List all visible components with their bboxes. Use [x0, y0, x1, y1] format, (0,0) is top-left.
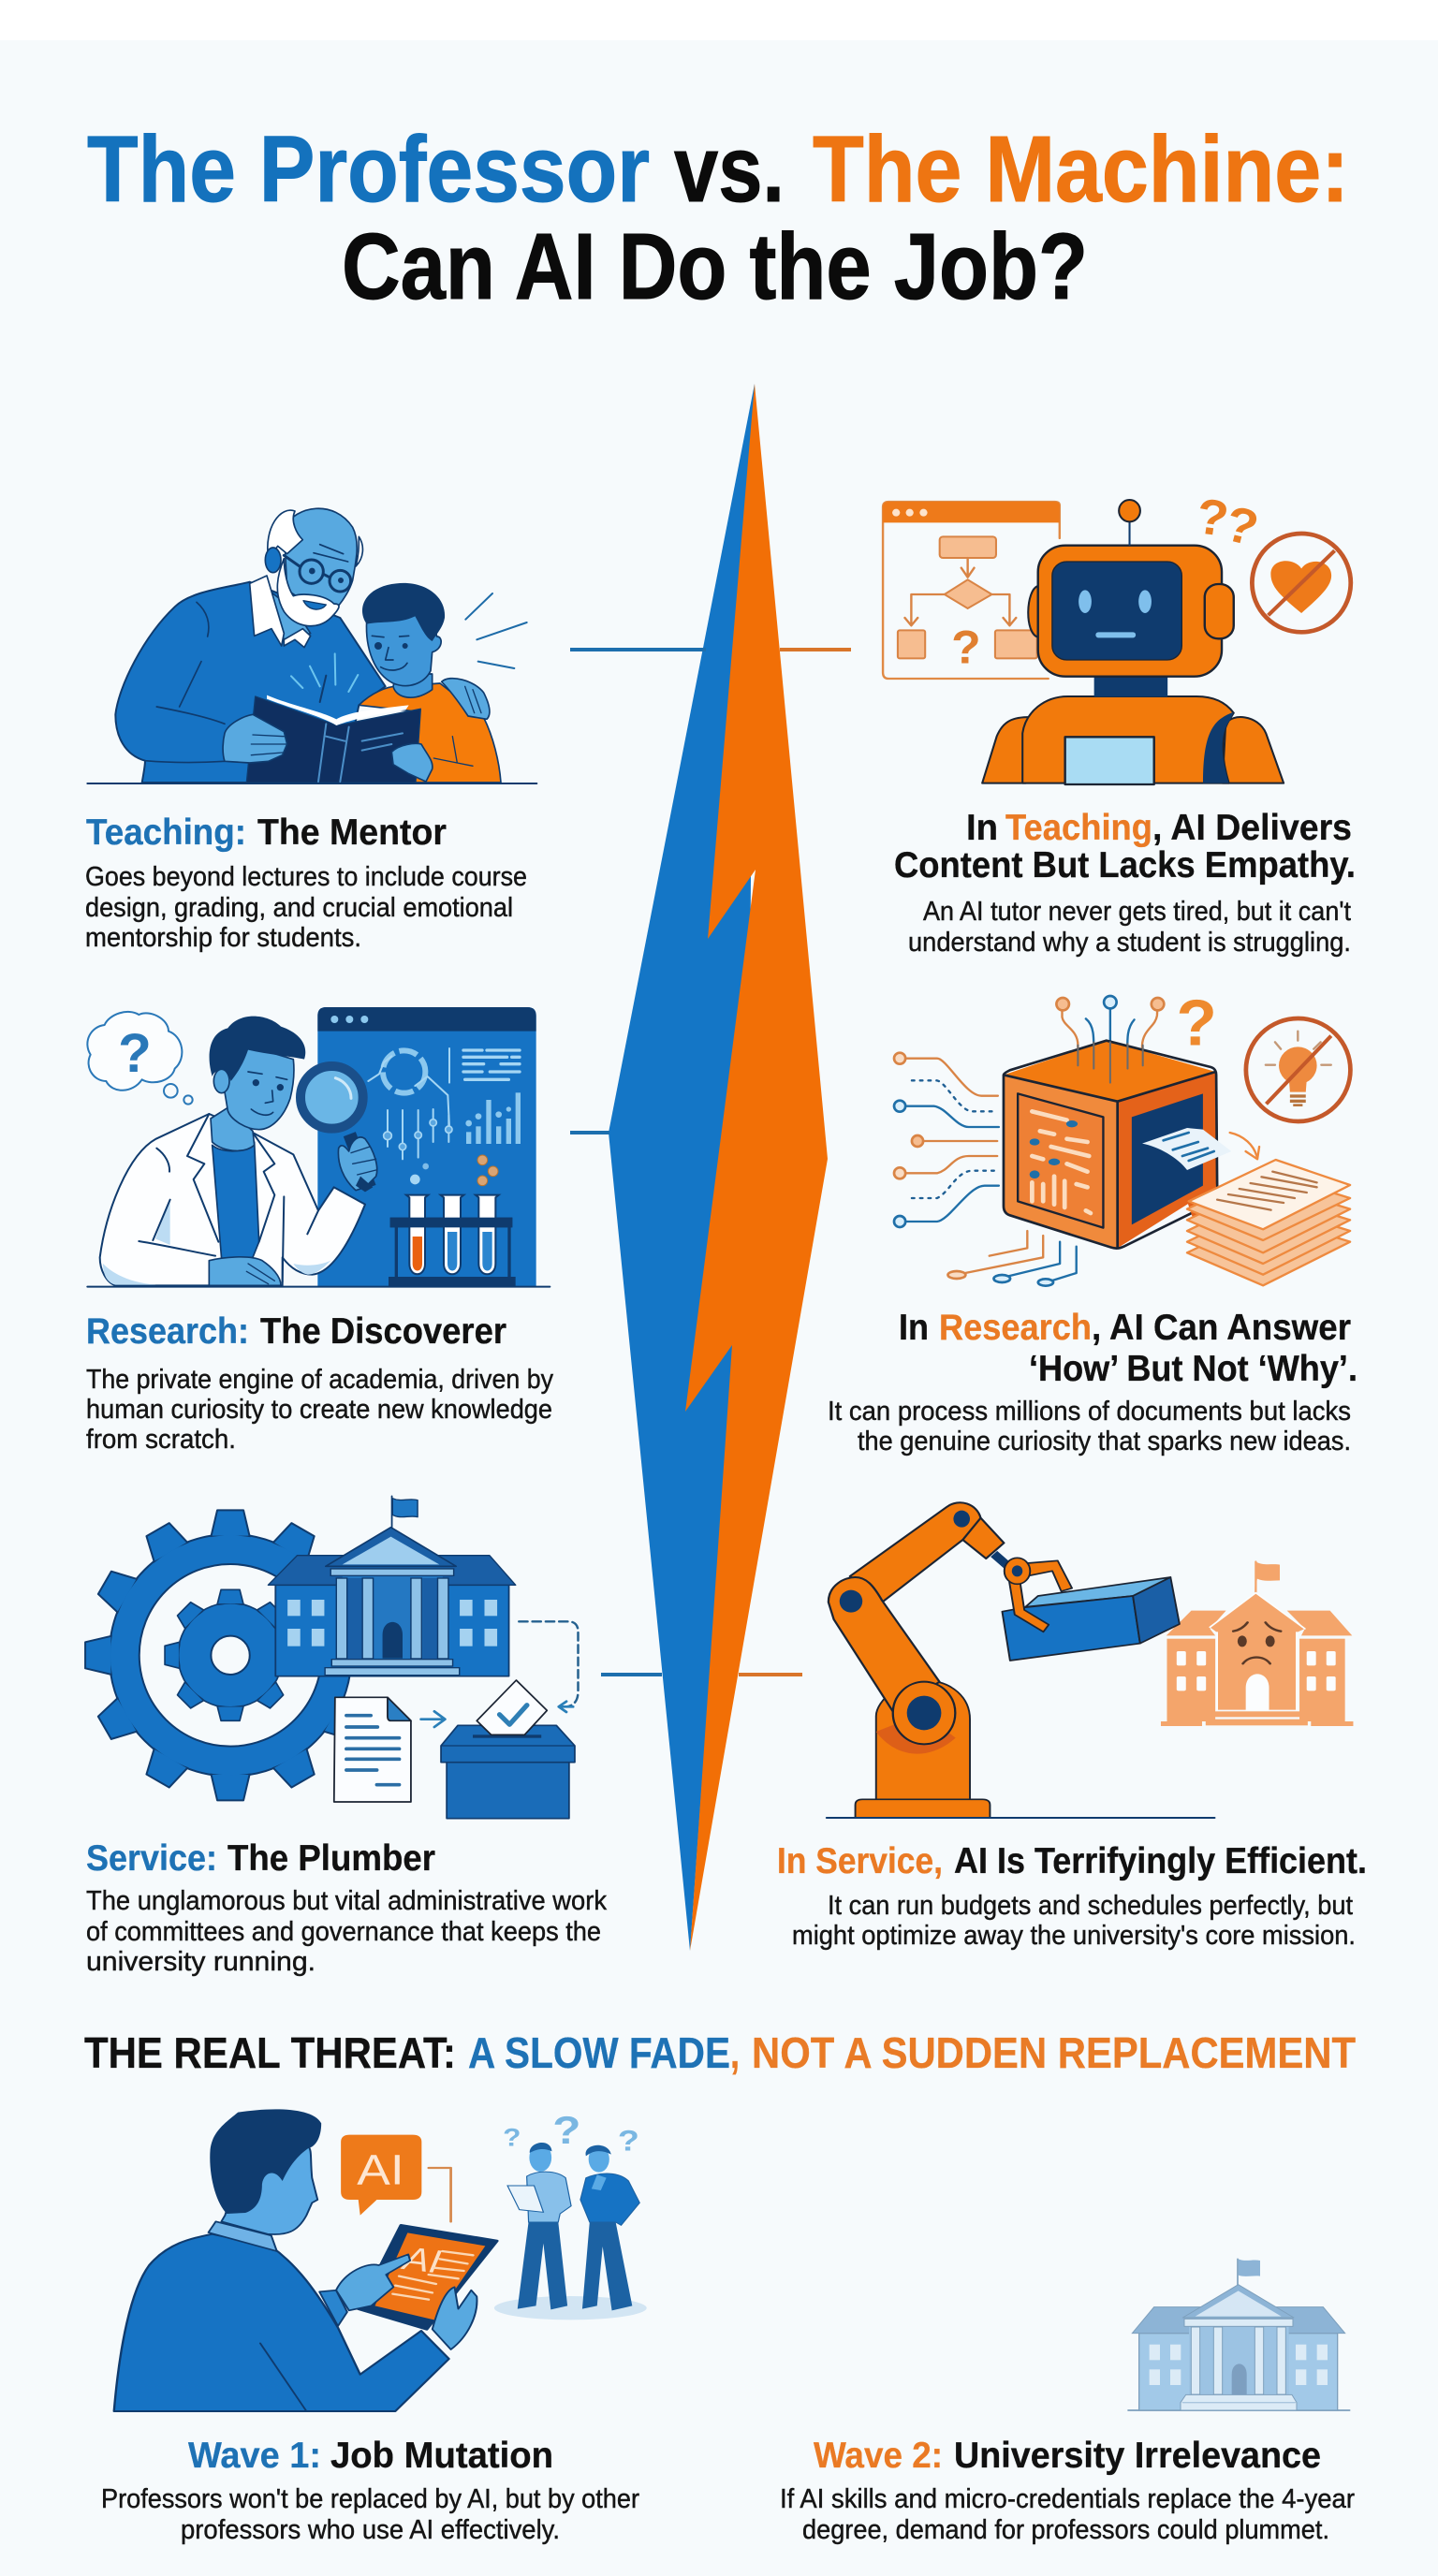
section heading: the real threat: A SLOW FADE: [468, 2028, 730, 2077]
text block: AI tutor: understand why a student is struggling.: [908, 928, 1351, 958]
icon: professor and student reading a book: [87, 508, 536, 783]
panel: research, the discoverer: [86, 1007, 553, 1455]
heading: AI in service: [777, 1841, 1367, 1881]
heading: Service: [86, 1838, 435, 1879]
panel: AI in service: [777, 1502, 1367, 1951]
section heading: the real threat: NOT A SUDDEN REPLACEMENT: [752, 2028, 1356, 2077]
icon: robot with flowchart and crossed heart: ?: [1220, 496, 1264, 557]
text block: research description: human curiosity to create new knowledge: [86, 1395, 552, 1425]
text block: budgets and schedules: [792, 1891, 1356, 1951]
text block: service description: [86, 1886, 607, 1977]
icon: robot with flowchart and crossed heart: ?: [1193, 489, 1232, 548]
connector lines: [570, 650, 851, 1675]
text block: research description: The private engine of academia, driven by: [86, 1365, 553, 1395]
heading: Teaching: The Mentor: [257, 812, 447, 853]
text block: university irrelevance description: If AI skills and micro-credentials replace the 4-year: [780, 2484, 1355, 2514]
heading: Research: [86, 1311, 506, 1352]
panel: AI in research: [828, 986, 1357, 1456]
text block: teaching description: mentorship for students.: [85, 923, 361, 953]
central lightning divider: [609, 384, 828, 1951]
text block: teaching description: design, grading, and crucial emotional: [85, 893, 513, 923]
text block: job mutation description: professors who use AI effectively.: [181, 2515, 560, 2545]
heading: Wave 2: Wave 2:: [814, 2436, 943, 2476]
heading: Teaching: Teaching:: [86, 812, 246, 853]
icon: AI cube processing documents: [894, 986, 1350, 1286]
text block: job mutation description: Professors won't be replaced by AI, but by other: [101, 2484, 639, 2514]
heading: Research: The Discoverer: [260, 1311, 506, 1352]
heading: AI in service: AI Is Terrifyingly Efficient.: [954, 1841, 1367, 1881]
heading: Research: Research:: [86, 1311, 249, 1352]
icon: faded university: [1128, 2259, 1350, 2410]
heading: AI in service: In Service,: [777, 1841, 943, 1881]
icon: robot with flowchart and crossed heart: [883, 489, 1351, 784]
text block: job mutation description: [101, 2484, 639, 2545]
text block: research description: from scratch.: [86, 1425, 236, 1455]
panel: service, the plumber: [85, 1496, 607, 1977]
text block: university irrelevance description: [780, 2484, 1355, 2545]
panel: wave 1, job mutation: [101, 2109, 647, 2545]
text block: teaching description: Goes beyond lectures to include course: [85, 862, 527, 892]
heading: AI in research: In: [899, 1308, 929, 1348]
title: The Professor: [87, 117, 650, 222]
icon: researcher with magnifier and data screen: [87, 1007, 550, 1287]
text block: teaching description: [85, 862, 527, 953]
heading: Wave 2: University Irrelevance: [954, 2436, 1321, 2476]
icon: professor using AI tablet with confused onlookers: ?: [552, 2109, 580, 2152]
heading: AI in research: [899, 1308, 1357, 1389]
text block: processing documents: the genuine curiosity that sparks new ideas.: [858, 1427, 1351, 1456]
text block: service description: The unglamorous but vital administrative work: [86, 1886, 607, 1916]
heading: AI in teaching: , AI Delivers: [1152, 808, 1352, 848]
panel: wave 2, university irrelevance: [780, 2259, 1355, 2545]
heading: Teaching: [86, 812, 447, 853]
title: The Machine:: [813, 117, 1349, 222]
heading: AI in teaching: Content But Lacks Empathy.: [894, 845, 1356, 886]
heading: AI in research: ‘How’ But Not ‘Why’.: [1029, 1349, 1357, 1389]
text block: research description: [86, 1365, 553, 1455]
title: Can AI Do the Job?: [342, 214, 1088, 319]
heading: Service: Service:: [86, 1838, 217, 1879]
section heading: the real threat: [84, 2028, 1356, 2077]
text block: AI tutor: An AI tutor never gets tired, but it can't: [923, 897, 1351, 927]
heading: Wave 1: Wave 1:: [188, 2436, 321, 2476]
text block: university irrelevance description: degree, demand for professors could plummet.: [802, 2515, 1329, 2545]
text block: service description: university running.: [86, 1947, 315, 1977]
text block: processing documents: It can process millions of documents but lacks: [828, 1397, 1351, 1427]
icon: professor using AI tablet with confused onlookers: AI: [357, 2146, 404, 2193]
panel: AI in teaching: [883, 489, 1356, 958]
text block: budgets and schedules: might optimize away the university's core mission.: [792, 1921, 1356, 1951]
icon: gears: [85, 1510, 375, 1800]
icon: robot with flowchart and crossed heart: ?: [951, 621, 981, 673]
icon: robot arm and sad university: [827, 1502, 1353, 1818]
heading: Wave 1: [188, 2436, 553, 2476]
heading: AI in research: , AI Can Answer: [1092, 1308, 1351, 1348]
text block: AI tutor: [908, 897, 1351, 958]
section heading: the real threat: THE REAL THREAT:: [84, 2028, 456, 2077]
heading: AI in teaching: [894, 808, 1356, 886]
title: vs.: [674, 117, 785, 222]
icon: professor using AI tablet with confused onlookers: [114, 2109, 647, 2411]
heading: AI in teaching: In: [966, 808, 998, 848]
heading: Wave 1: Job Mutation: [330, 2436, 553, 2476]
panel: teaching, the mentor: [85, 508, 536, 953]
text block: processing documents: [828, 1397, 1351, 1456]
icon: professor using AI tablet with confused onlookers: ?: [618, 2125, 639, 2158]
heading: AI in teaching: Teaching: [1005, 808, 1152, 848]
title: [87, 117, 1349, 319]
text block: service description: of committees and governance that keeps the: [86, 1917, 601, 1947]
icon: professor using AI tablet with confused onlookers: ?: [503, 2125, 521, 2152]
text block: budgets and schedules: It can run budgets and schedules perfectly, but: [828, 1891, 1353, 1921]
section heading: the real threat: ,: [730, 2028, 740, 2077]
heading: AI in research: Research: [939, 1308, 1092, 1348]
icon: AI cube processing documents: ?: [1176, 986, 1217, 1060]
icon: professor using AI tablet with confused onlookers: AI: [399, 2240, 444, 2281]
icon: gears, university, document and ballot box: [85, 1496, 578, 1819]
heading: Service: The Plumber: [227, 1838, 435, 1879]
icon: researcher with magnifier and data screen: ?: [118, 1023, 152, 1084]
